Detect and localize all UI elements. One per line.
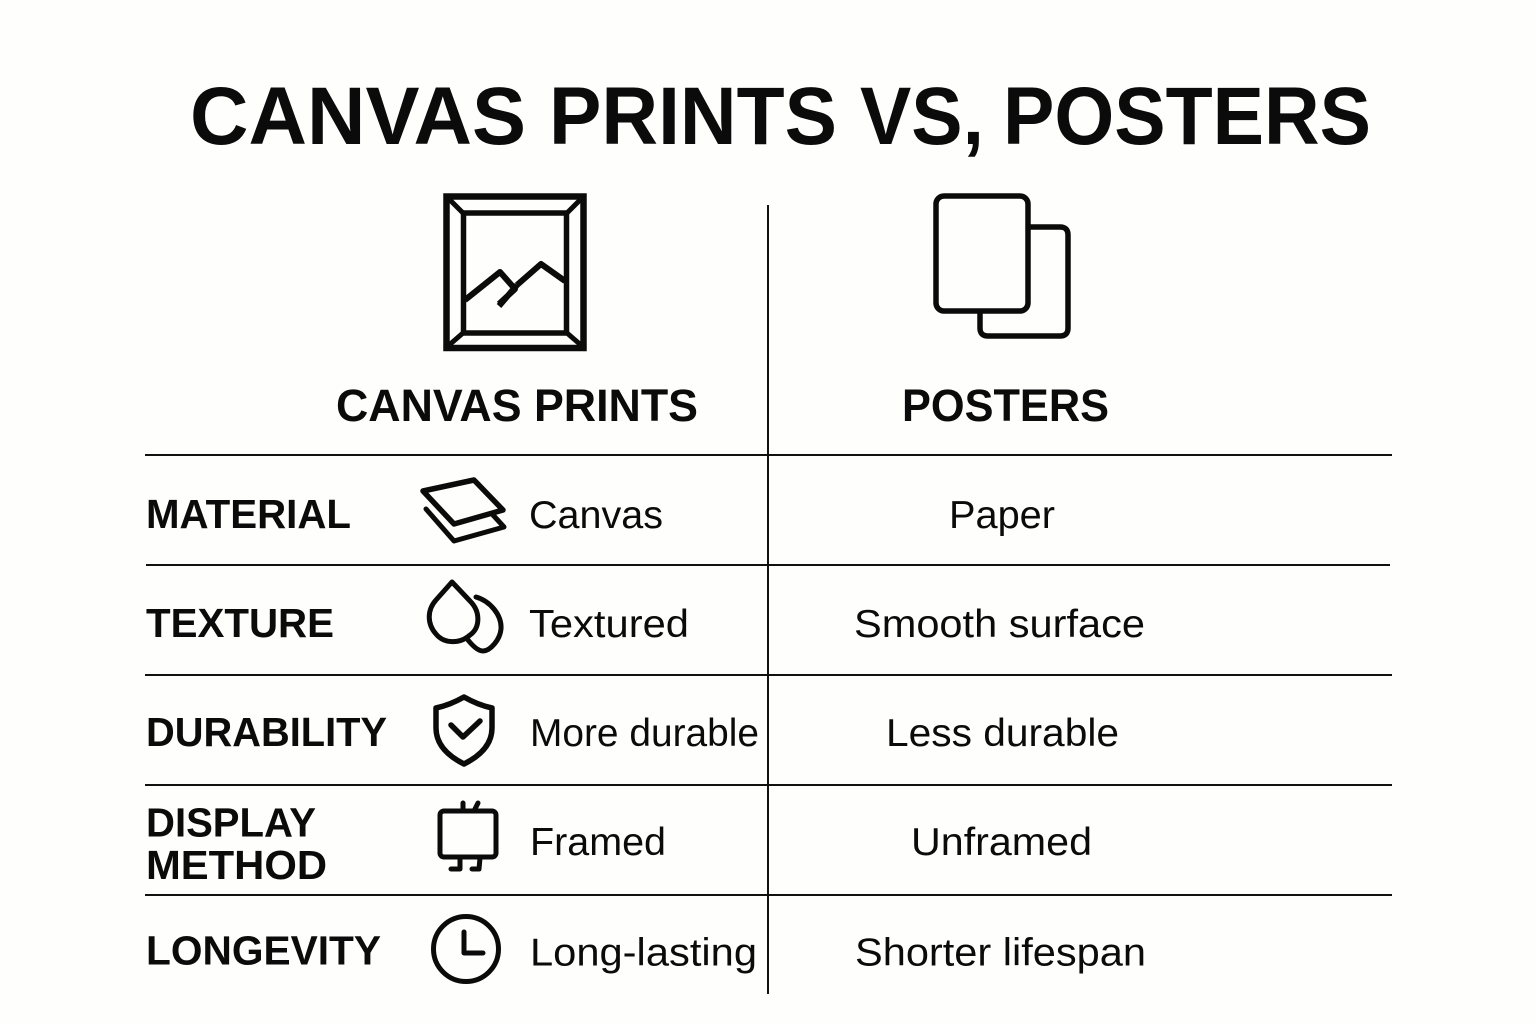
title: PRINTS: [549, 71, 837, 162]
title: CANVAS: [190, 71, 526, 162]
icon: layers: [423, 480, 504, 541]
title: [190, 71, 1371, 162]
title: POSTERS: [1003, 71, 1371, 162]
label: longevity: LONGEVITY: [146, 928, 381, 974]
icon: poster sheets: [936, 196, 1068, 336]
label: display method: DISPLAY: [146, 800, 316, 846]
heading: posters: POSTERS: [902, 380, 1109, 431]
value: paper: Paper: [949, 494, 1055, 537]
row: material: [146, 480, 1055, 541]
value: framed: Framed: [530, 821, 666, 864]
label: display method: [146, 800, 327, 888]
icon: droplets: [429, 582, 501, 651]
value: unframed: Unframed: [911, 821, 1092, 864]
value: shorter lifespan: Shorter lifespan: [855, 932, 1146, 974]
icon: clock: [434, 916, 498, 982]
heading: canvas prints: CANVAS PRINTS: [336, 380, 698, 431]
label: texture: TEXTURE: [146, 600, 334, 646]
icon: framed canvas: [446, 196, 584, 348]
value: canvas: Canvas: [529, 494, 663, 537]
row: longevity: [146, 916, 1146, 982]
label: display method: METHOD: [146, 842, 327, 888]
value: long-lasting: Long-lasting: [530, 932, 757, 974]
title: VS,: [860, 71, 984, 162]
icon: shield with check: [436, 697, 492, 764]
panel: column headers: [336, 196, 1109, 431]
row: durability: [146, 697, 1119, 764]
icon: framed display on stand: [440, 803, 496, 869]
value: textured: Textured: [529, 603, 689, 646]
row: texture: [146, 582, 1145, 651]
label: material: MATERIAL: [146, 491, 351, 537]
value: less durable: Less durable: [886, 712, 1119, 755]
value: smooth surface: Smooth surface: [854, 603, 1145, 646]
value: more durable: More durable: [530, 712, 759, 755]
row: display method: [146, 800, 1092, 888]
label: durability: DURABILITY: [146, 709, 387, 755]
